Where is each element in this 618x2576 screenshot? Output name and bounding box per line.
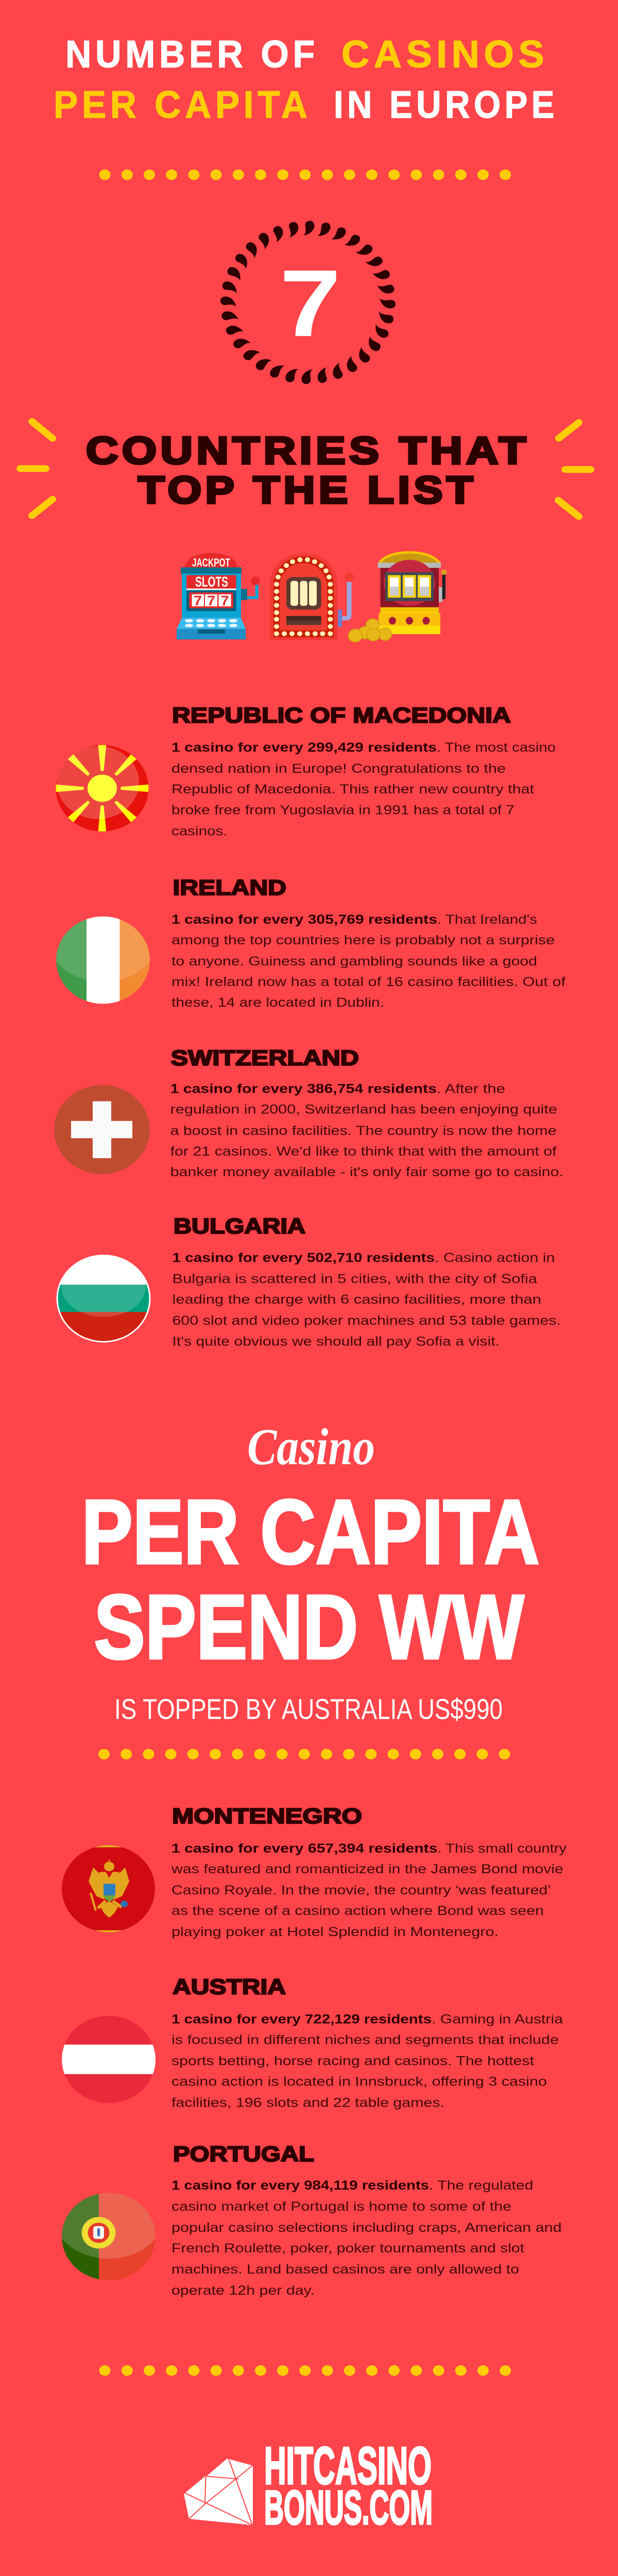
- text block: montenegro: Casino Royale. In the movie, the country ‘was featured’: [171, 1883, 551, 1897]
- heading: casino per capita spend: Casino: [247, 1418, 375, 1476]
- panel: portugal: [55, 2142, 562, 2298]
- number seven with teardrop ring: [220, 221, 396, 384]
- panel: montenegro: [62, 1804, 566, 1939]
- text block: portugal: casino market of Portugal is home to some of the: [171, 2199, 511, 2214]
- icon: flag of montenegro: [62, 1845, 156, 1933]
- text block: austria: 1 casino for every 722,129 residents: [171, 2011, 432, 2026]
- text block: austria: is focused in different niches and segments that include: [171, 2032, 559, 2047]
- text block: bulgaria: It's quite obvious we should all pay Sofia a visit.: [172, 1334, 500, 1349]
- text block: austria: [171, 2011, 563, 2110]
- heading: bulgaria: BULGARIA: [174, 1214, 305, 1238]
- panel: austria: [62, 1975, 563, 2110]
- text block: macedonia: densed nation in Europe! Congratulations to the: [171, 761, 506, 776]
- icon: gold slot machine with coins: [348, 551, 447, 642]
- text block: switzerland: . After the: [437, 1081, 505, 1096]
- dotted divider: middle: [98, 1749, 510, 1759]
- panel: ireland: [49, 876, 566, 1010]
- text block: macedonia: broke free from Yugoslavia in 1991 has a total of 7: [171, 802, 514, 817]
- icon: flag of bulgaria: [57, 1255, 150, 1342]
- text block: montenegro: 1 casino for every 657,394 residents: [171, 1841, 438, 1856]
- panel: republic of macedonia: [55, 704, 556, 838]
- text block: switzerland: 1 casino for every 386,754 residents: [170, 1081, 437, 1096]
- text block: bulgaria: Bulgaria is scattered in 5 cities, with the city of Sofia: [172, 1272, 538, 1286]
- text block: portugal: machines. Land based casinos are only allowed to: [171, 2262, 519, 2277]
- logo: hitcasinobonus.com: [184, 2436, 433, 2534]
- text block: montenegro: playing poker at Hotel Splendid in Montenegro.: [171, 1924, 499, 1939]
- icon: blue jackpot slot machine: 7: [194, 593, 202, 608]
- text block: austria: facilities, 196 slots and 22 table games.: [171, 2095, 444, 2110]
- dotted divider: bottom: [99, 2365, 511, 2376]
- text block: montenegro: [171, 1841, 566, 1939]
- text block: switzerland: [170, 1081, 563, 1179]
- logo: hitcasinobonus.com: BONUS.COM: [264, 2481, 433, 2534]
- text block: portugal: French Roulette, poker, poker tournaments and slot: [171, 2241, 525, 2256]
- title: PER CAPITA: [54, 83, 312, 126]
- title: CASINOS: [341, 33, 548, 76]
- icon: blue jackpot slot machine: 7: [220, 593, 229, 608]
- text block: bulgaria: 600 slot and video poker machines and 53 table games.: [172, 1313, 561, 1328]
- text block: bulgaria: 1 casino for every 502,710 residents: [172, 1250, 435, 1265]
- icon: flag of portugal: [62, 2193, 156, 2280]
- icon: diamond: [184, 2459, 253, 2525]
- text block: switzerland: a boost in casino facilities. The country is now the home: [170, 1123, 557, 1138]
- text block: macedonia: . The most casino: [437, 740, 556, 755]
- rays: right: [558, 422, 591, 517]
- text block: bulgaria: . Casino action in: [435, 1250, 555, 1265]
- text block: portugal: operate 12h per day.: [171, 2283, 315, 2298]
- text block: macedonia: 1 casino for every 299,429 residents: [171, 740, 437, 755]
- heading: countries that top the list: TOP THE LIST: [138, 469, 477, 512]
- text block: portugal: 1 casino for every 984,119 residents: [171, 2178, 429, 2193]
- logo: hitcasinobonus.com: HITCASINO: [264, 2436, 432, 2495]
- text block: ireland: these, 14 are located in Dublin.: [171, 995, 384, 1010]
- panel: switzerland: [54, 1046, 563, 1179]
- text block: ireland: mix! Ireland now has a total of 16 casino facilities. Out of: [171, 974, 566, 989]
- text block: austria: . Gaming in Austria: [432, 2011, 563, 2026]
- heading: countries that top the list: COUNTRIES THAT: [86, 430, 530, 472]
- text block: switzerland: for 21 casinos. We'd like to think that with the amount of: [170, 1144, 557, 1159]
- text block: switzerland: regulation in 2000, Switzerland has been enjoying quite: [170, 1102, 557, 1117]
- rays: left: [20, 421, 53, 516]
- number seven with teardrop ring: 7: [280, 250, 341, 357]
- text block: ireland: . That Ireland's: [437, 912, 537, 927]
- text block: montenegro: as the scene of a casino action where Bond was seen: [171, 1903, 544, 1918]
- text block: macedonia: [171, 740, 556, 838]
- dotted divider: top: [99, 170, 511, 180]
- text block: montenegro: was featured and romanticized in the James Bond movie: [171, 1861, 563, 1876]
- icon: flag of austria: [62, 2016, 156, 2103]
- text block: austria: sports betting, horse racing and casinos. The hottest: [171, 2053, 535, 2068]
- text block: portugal: popular casino selections including craps, American and: [171, 2220, 562, 2235]
- heading: switzerland: SWITZERLAND: [171, 1046, 359, 1070]
- text block: bulgaria: [172, 1250, 561, 1349]
- title: NUMBER OF: [65, 33, 319, 76]
- title: [54, 33, 558, 126]
- text block: switzerland: banker money available - it's only fair some go to casino.: [170, 1164, 563, 1179]
- text block: macedonia: Republic of Macedonia. This rather new country that: [171, 782, 535, 796]
- heading: austria: AUSTRIA: [173, 1975, 286, 1999]
- icon: flag of ireland: [56, 916, 150, 1004]
- icon: blue jackpot slot machine: JACKPOT: [192, 556, 230, 569]
- text block: ireland: 1 casino for every 305,769 residents: [171, 912, 437, 927]
- text block: austria: casino action is located in Innsbruck, offering 3 casino: [171, 2074, 547, 2089]
- text block: macedonia: casinos.: [171, 823, 227, 838]
- heading: republic of macedonia: REPUBLIC OF MACEDONIA: [172, 704, 511, 727]
- text block: montenegro: . This small country: [438, 1841, 566, 1856]
- icon: blue jackpot slot machine: 7: [207, 593, 215, 608]
- heading: casino per capita spend: [81, 1418, 539, 1725]
- icon: flag of switzerland: [54, 1085, 150, 1174]
- text block: portugal: . The regulated: [429, 2178, 533, 2193]
- text block: ireland: among the top countries here is probably not a surprise: [171, 933, 555, 947]
- text block: ireland: to anyone. Guiness and gambling sounds like a good: [171, 954, 537, 969]
- panel: bulgaria: [57, 1214, 561, 1349]
- icon: blue jackpot slot machine: SLOTS: [195, 574, 228, 590]
- text block: ireland: [171, 912, 566, 1010]
- heading: ireland: IRELAND: [173, 876, 286, 900]
- heading: portugal: PORTUGAL: [173, 2142, 314, 2166]
- icon: red arch slot machine: [270, 553, 354, 640]
- title: IN EUROPE: [334, 83, 558, 126]
- icon: flag of macedonia: [55, 744, 149, 833]
- text block: bulgaria: leading the charge with 6 casino facilities, more than: [172, 1292, 541, 1307]
- heading: countries that top the list: [86, 430, 530, 512]
- heading: casino per capita spend: IS TOPPED BY AUSTRALIA US$990: [114, 1694, 503, 1725]
- icon: blue jackpot slot machine: [177, 553, 260, 639]
- heading: montenegro: MONTENEGRO: [172, 1804, 362, 1828]
- text block: portugal: [171, 2178, 562, 2298]
